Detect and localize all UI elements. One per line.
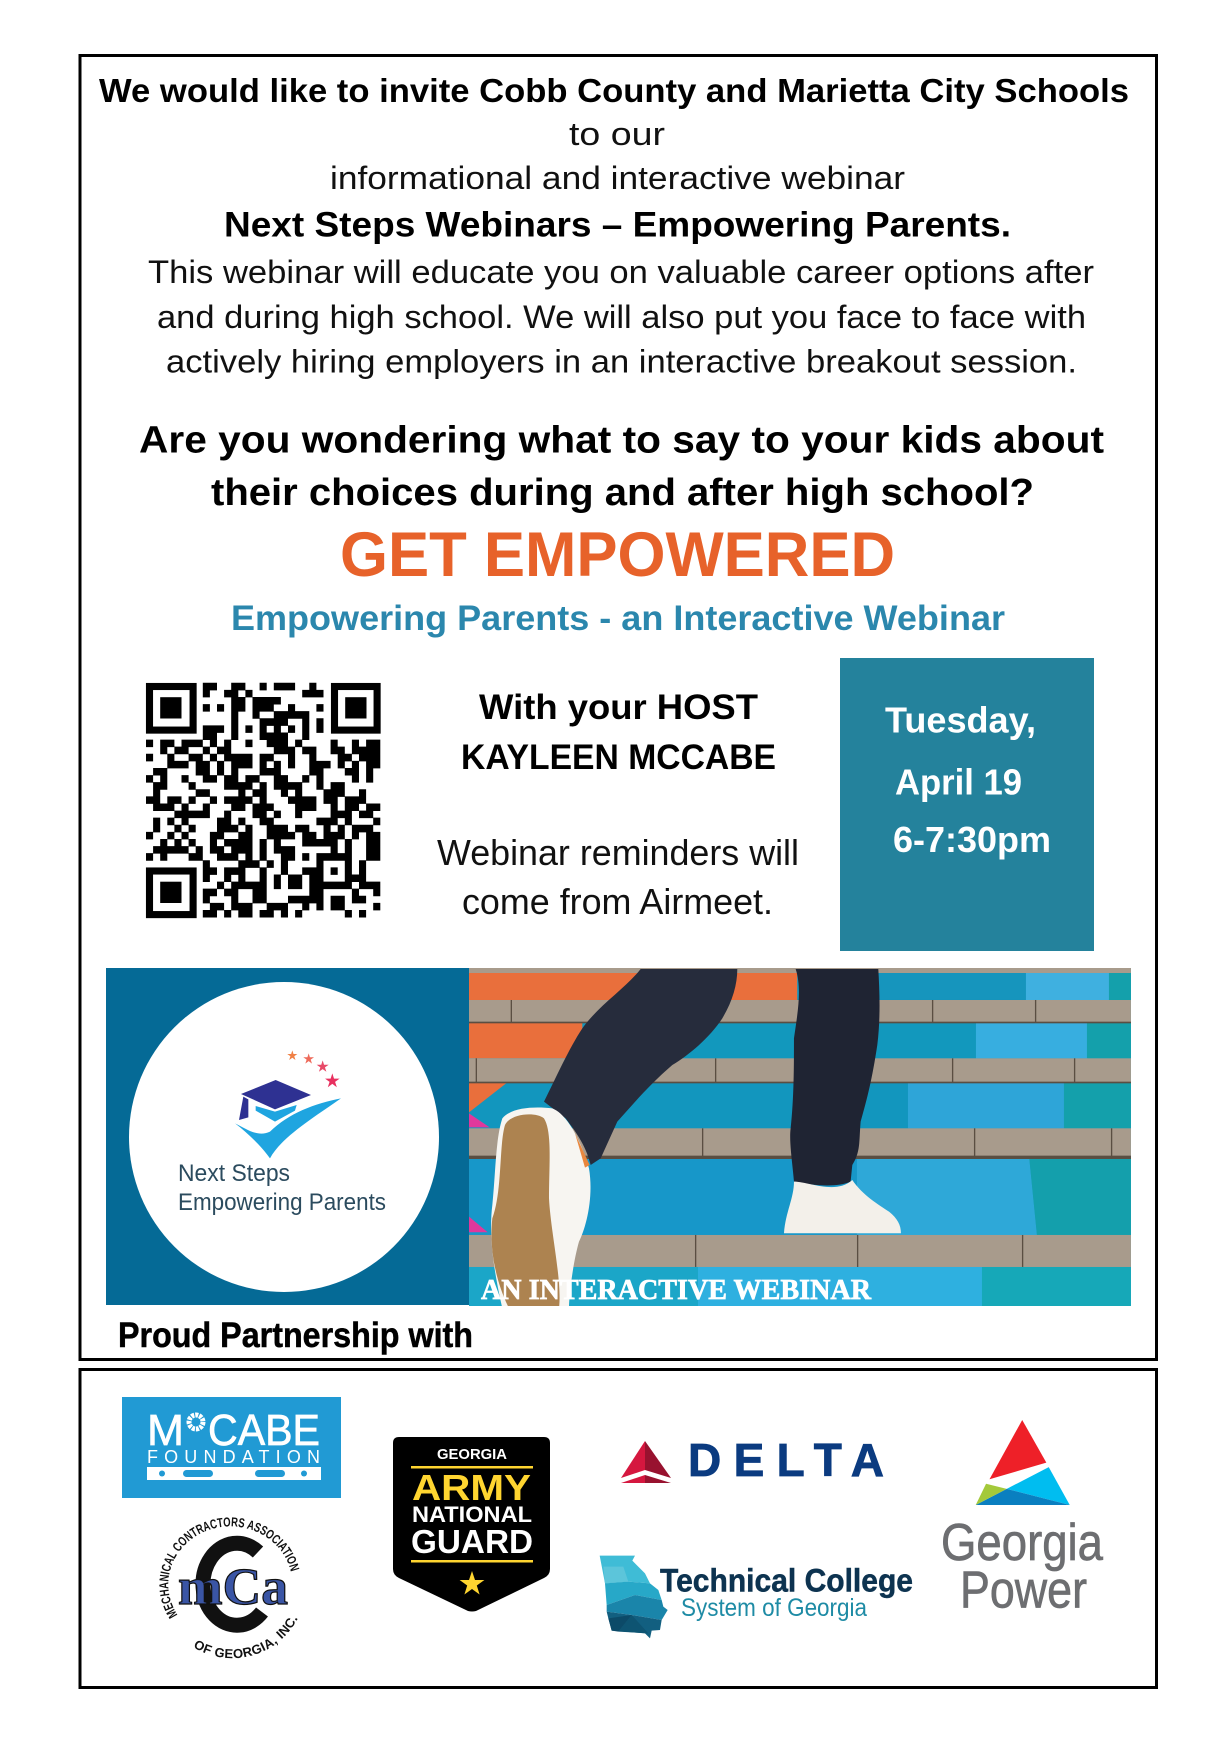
reminder note: Webinar reminders will	[437, 832, 799, 873]
logo: Technical College System of Georgia: System of Georgia	[681, 1594, 867, 1622]
logo: McCabe Foundation: FOUNDATION	[147, 1447, 320, 1467]
logo: Technical College System of Georgia	[600, 1556, 913, 1638]
paragraph: webinar description: and during high school. We will also put you face to face with	[157, 299, 1086, 335]
invitation heading: We would like to invite Cobb County and Marietta City Schools	[99, 72, 1129, 109]
heading: webinar name: Next Steps Webinars – Empowering Parents.	[224, 206, 1011, 244]
question heading: Are you wondering what to say to your kids about	[139, 420, 1104, 462]
reminder note	[437, 832, 799, 922]
question heading: their choices during and after high school?	[211, 472, 1034, 514]
logo: Georgia Army National Guard	[393, 1437, 550, 1612]
reminder note: come from Airmeet.	[462, 881, 773, 922]
QR code	[146, 686, 380, 915]
text: to our: to our	[569, 116, 665, 152]
logo: Georgia Power: Power	[960, 1562, 1087, 1620]
host name: KAYLEEN MCCABE	[461, 738, 776, 777]
host name: With your HOST	[479, 688, 758, 727]
logo text: next steps: Empowering Parents	[178, 1189, 386, 1216]
date panel: Tuesday,	[885, 700, 1036, 740]
banner: stairs photo	[469, 968, 1131, 1308]
date panel: April 19	[895, 762, 1022, 802]
logo: Technical College System of Georgia: Technical College	[660, 1562, 913, 1598]
text: informational webinar: informational and interactive webinar	[330, 160, 905, 196]
logo: McCabe Foundation	[122, 1397, 341, 1498]
banner caption: AN INTERACTIVE WEBINAR	[481, 1274, 872, 1306]
logo: Georgia Power	[941, 1420, 1103, 1620]
person: rear leg	[544, 969, 737, 1165]
icon: Georgia map	[600, 1556, 668, 1638]
date panel: 6-7:30pm	[893, 819, 1051, 860]
logo: Georgia Army National Guard: GUARD	[411, 1523, 533, 1560]
question heading	[139, 420, 1104, 514]
person: rear shoe	[491, 1108, 591, 1308]
logo: Mechanical Contractors Association	[159, 1517, 300, 1658]
person: front leg	[790, 969, 880, 1185]
logo: Mechanical Contractors Association: OF GEORGIA, INC.	[194, 1618, 298, 1658]
date panel	[840, 658, 1094, 951]
logo: Georgia Army National Guard: ARMY	[412, 1467, 531, 1508]
logo: Delta: DELTA	[688, 1434, 884, 1486]
logo text: next steps	[178, 1160, 386, 1216]
logo: McCabe Foundation: M	[147, 1406, 184, 1455]
banner: next steps logo panel	[106, 968, 469, 1305]
panel: partners	[78, 1368, 1158, 1689]
logo text: next steps: Next Steps	[178, 1160, 290, 1187]
icon: graduation cap, check and stars	[235, 1050, 341, 1158]
headline: get empowered: GET EMPOWERED	[340, 520, 895, 590]
logo: Georgia Army National Guard: NATIONAL	[412, 1502, 532, 1527]
stone steps	[469, 968, 1131, 1267]
step shadows and joints	[469, 1000, 1131, 1267]
logo: McCabe Foundation: CABE	[208, 1406, 320, 1455]
panel: invitation	[80, 56, 1156, 1360]
logo: Mechanical Contractors Association: mCa	[178, 1559, 288, 1616]
paragraph: webinar description: actively hiring employers in an interactive breakout session.	[166, 344, 1077, 380]
paragraph: webinar description	[148, 254, 1094, 380]
heading: proud partnership: Proud Partnership with	[118, 1316, 473, 1355]
stair row colours	[469, 972, 1131, 1308]
host name	[461, 688, 776, 777]
paragraph: webinar description: This webinar will educate you on valuable career options after	[148, 254, 1094, 290]
logo: Georgia Power: Georgia	[941, 1514, 1103, 1572]
person: front shoe	[784, 1180, 901, 1233]
logo: Mechanical Contractors Association: MECHANICAL CONTRACTORS ASSOCIATION	[159, 1517, 300, 1619]
subheading: interactive webinar: Empowering Parents - an Interactive Webinar	[231, 599, 1005, 638]
logo: Georgia Army National Guard: GEORGIA	[437, 1446, 507, 1463]
